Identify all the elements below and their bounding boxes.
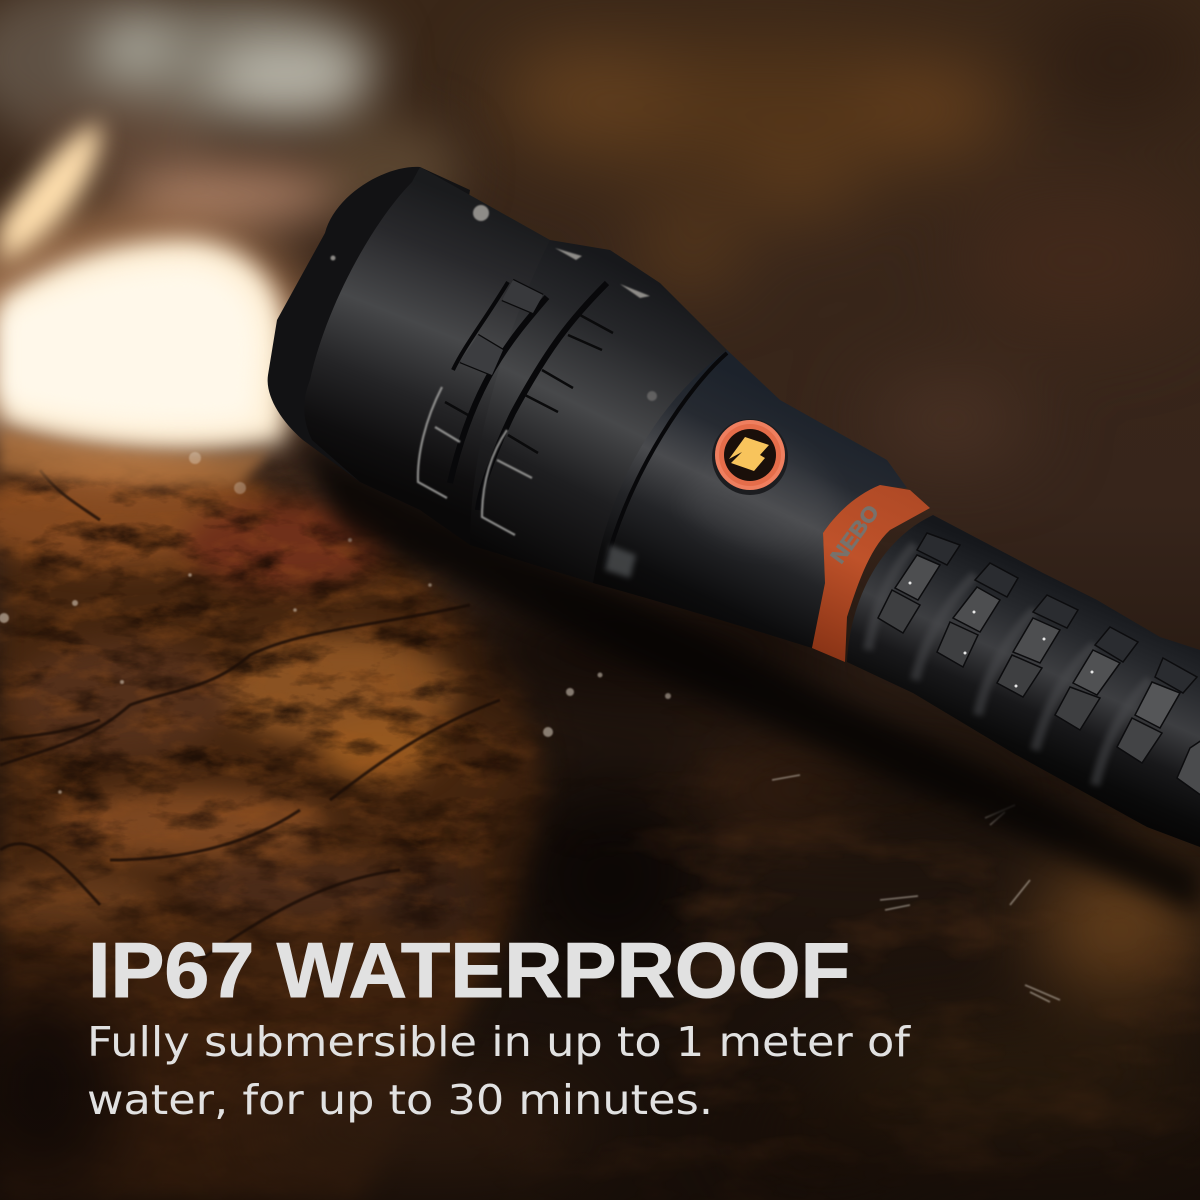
flashlight mid barrel — [470, 240, 727, 583]
light beam glow — [0, 122, 320, 486]
heading: IP67 WATERPROOF — [88, 926, 850, 1014]
flashlight — [268, 167, 1200, 915]
grip water drops — [908, 582, 1094, 688]
grip tabs — [878, 533, 1200, 796]
NEBO logo text: NEBO — [826, 501, 884, 568]
dew marks — [330, 205, 657, 401]
neck highlight — [680, 430, 840, 548]
N logo — [729, 437, 769, 471]
rock cracks — [0, 470, 500, 960]
flashlight bezel — [268, 167, 470, 510]
grip ridges — [868, 545, 1150, 785]
ring grooves — [450, 282, 727, 567]
flashlight head barrel — [304, 167, 560, 545]
water blob on neck — [605, 545, 636, 578]
description line 1: Fully submersible in up to 1 meter of — [87, 1018, 912, 1066]
water specks on rock — [0, 452, 1060, 1002]
control band right tabs — [482, 315, 613, 535]
orange collar — [812, 485, 930, 662]
power button — [712, 419, 788, 495]
grip handle — [847, 515, 1200, 847]
flashlight shadow — [300, 440, 1200, 915]
control band left tabs — [418, 280, 543, 498]
description line 2: water, for up to 30 minutes. — [87, 1076, 713, 1124]
rock surface lower left — [0, 457, 552, 1200]
flashlight neck — [593, 350, 907, 648]
dark wet foreground — [0, 588, 1200, 1200]
